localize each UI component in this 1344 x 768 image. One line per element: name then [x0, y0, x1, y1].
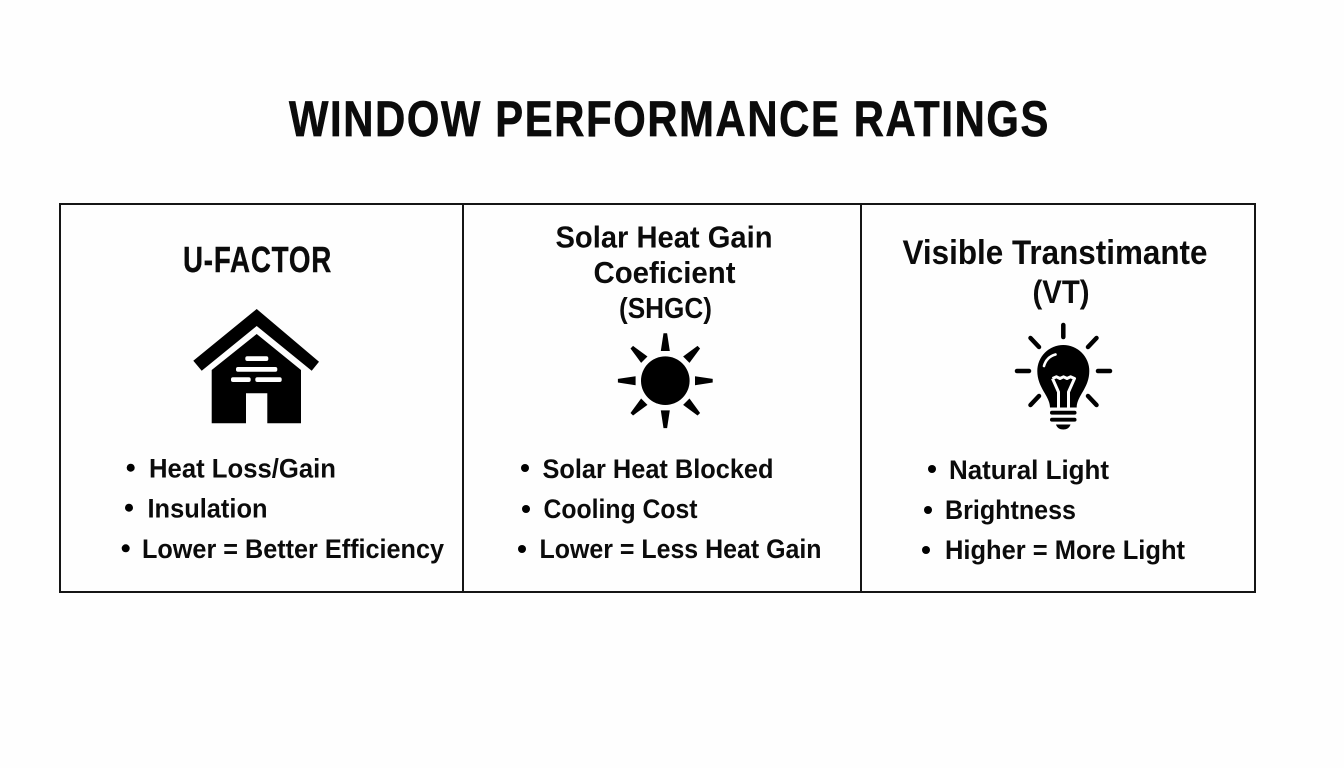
- heading: U-Factor: U-FACTOR: [183, 239, 332, 280]
- panel: SHGC: [518, 220, 822, 564]
- icon: light bulb: [1017, 325, 1110, 430]
- list: VT points: [922, 455, 1185, 565]
- list: SHGC points: [518, 454, 822, 564]
- heading: Solar Heat Gain Coefficient: Coeficient: [594, 255, 736, 290]
- panel: Visible Transmittance: [902, 234, 1208, 565]
- heading: Visible Transmittance: Visible Transtimante: [902, 234, 1208, 272]
- list: SHGC points: Solar Heat Blocked: [542, 454, 774, 484]
- list: SHGC points: Cooling Cost: [544, 494, 698, 524]
- list: VT points: Natural Light: [949, 455, 1109, 485]
- list: U-Factor points: Insulation: [148, 494, 268, 524]
- list: VT points: Higher = More Light: [945, 535, 1185, 565]
- panel: U-Factor: [122, 239, 444, 564]
- list: SHGC points: Lower = Less Heat Gain: [540, 534, 822, 564]
- heading: Solar Heat Gain Coefficient: Solar Heat Gain: [556, 220, 772, 254]
- list: U-Factor points: [122, 454, 444, 564]
- list: U-Factor points: Heat Loss/Gain: [149, 454, 336, 484]
- list: VT points: Brightness: [945, 495, 1076, 525]
- list: U-Factor points: Lower = Better Efficiency: [142, 534, 444, 564]
- heading: Visible Transmittance: (VT): [1032, 274, 1090, 310]
- table frame: [60, 204, 1255, 592]
- heading: Solar Heat Gain Coefficient: (SHGC): [619, 293, 712, 325]
- title: WINDOW PERFORMANCE RATINGS: [289, 91, 1050, 147]
- heading: Visible Transmittance: [902, 234, 1208, 310]
- icon: sun: [618, 333, 713, 428]
- heading: Solar Heat Gain Coefficient: [556, 220, 772, 325]
- icon: house: [193, 309, 319, 423]
